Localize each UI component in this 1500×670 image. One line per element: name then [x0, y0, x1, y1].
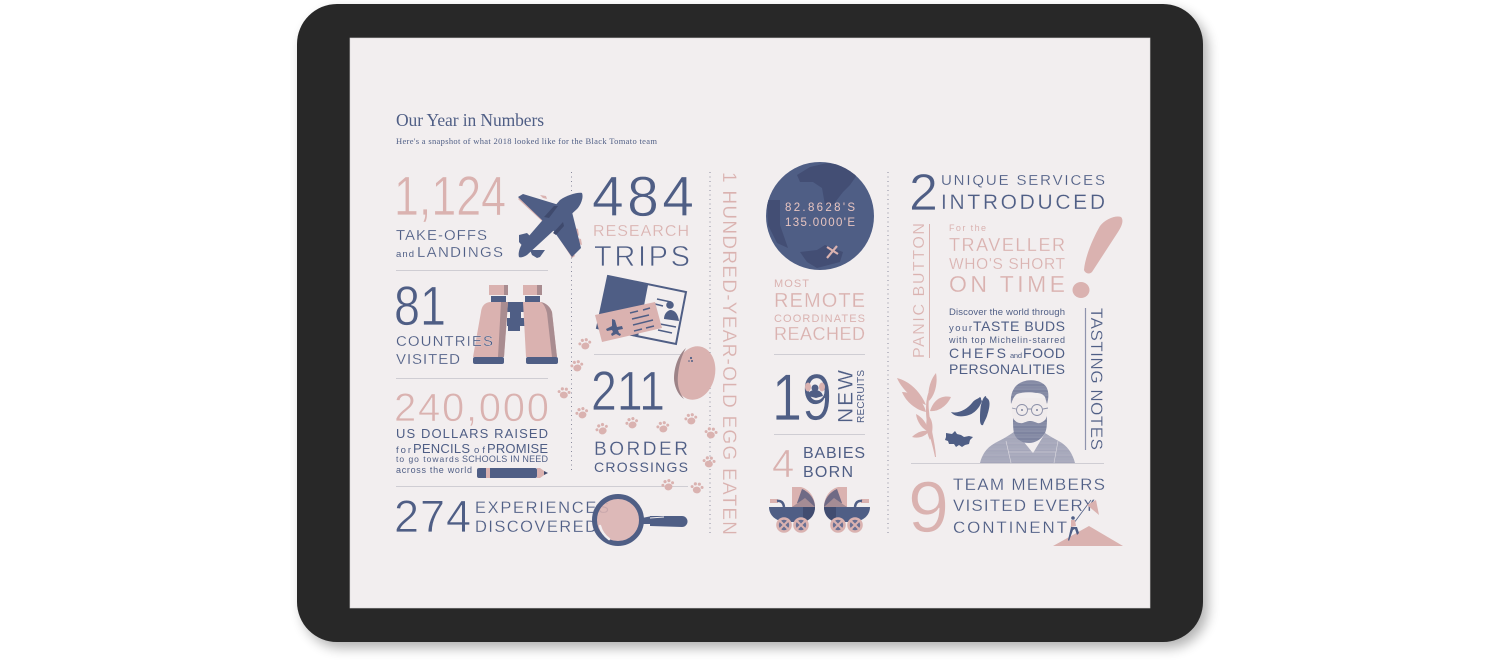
icon: herb sprig	[897, 373, 951, 457]
stat: 2 unique services introduced: 2	[909, 164, 938, 222]
stat: 4 babies born: 4	[772, 442, 794, 486]
icon: people inside nine	[805, 382, 825, 398]
icon: mountain with flag and climber	[1053, 500, 1123, 546]
stat: 9 team members visited every continent	[908, 468, 1105, 548]
text: for the traveller who's short on time	[949, 223, 1066, 297]
paw print trail	[557, 337, 718, 494]
stat: 240,000 dollars raised: US DOLLARS RAISED	[396, 426, 548, 441]
stat: 240,000 dollars raised: for	[396, 445, 411, 456]
text: discover the world through taste buds: TASTE BUDS	[973, 318, 1065, 334]
text: discover the world through taste buds	[948, 307, 1065, 377]
x marker	[827, 246, 838, 258]
stat: 240,000 dollars raised: to go towards	[396, 454, 459, 464]
stat: 4 babies born	[772, 442, 865, 486]
thin row dividers	[396, 270, 1104, 486]
coordinates: 82.8628'S	[785, 202, 855, 214]
stat: 9 team members visited every continent: 9	[908, 468, 949, 548]
icon: magnifying glass	[594, 496, 688, 544]
text: discover the world through taste buds: Discover the world through	[949, 307, 1065, 318]
icon: pencil	[477, 468, 548, 478]
stat: 484 research trips: TRIPS	[594, 241, 690, 273]
stat: 9 team members visited every continent: CONTINENT	[953, 518, 1067, 537]
stat: 19 new recruits: NEW	[834, 370, 858, 423]
stat: 240,000 dollars raised: of	[474, 445, 485, 456]
stat: 211 border crossings: BORDER	[594, 439, 688, 460]
icon: star anise	[945, 431, 973, 447]
text: discover the world through taste buds: PERSONALITIES	[949, 361, 1065, 377]
stat: 484 research trips	[592, 165, 694, 273]
stat: 1,124 take-offs and landings: 1,124	[394, 164, 506, 227]
label: countries visited: VISITED	[396, 351, 460, 368]
text: discover the world through taste buds: FOOD	[1023, 345, 1065, 361]
icon: exclamation mark	[1072, 216, 1122, 298]
vertical text: 1 hundred-year-old egg eaten: 1 HUNDRED-YEAR-OLD EGG EATEN	[718, 172, 739, 535]
globe continents	[767, 163, 857, 268]
stat: 211 border crossings	[591, 359, 688, 475]
stat: 274 experiences discovered	[394, 491, 609, 542]
label: most remote coordinates reached: COORDINATES	[774, 313, 865, 325]
stat: 484 research trips: 484	[592, 165, 694, 229]
icon: prams	[769, 487, 870, 532]
stat: 2 unique services introduced: INTRODUCED	[941, 191, 1105, 214]
text: discover the world through taste buds: with top Michelin-starred	[948, 335, 1065, 345]
stat: 19 new recruits: RECRUITS	[856, 370, 867, 423]
icon: plane	[518, 193, 583, 258]
label: most remote coordinates reached	[774, 278, 865, 344]
stat: 2 unique services introduced	[909, 164, 1105, 222]
stat: 240,000 dollars raised	[394, 386, 549, 475]
icon: binoculars	[473, 285, 558, 364]
label: countries visited	[396, 333, 493, 368]
label: most remote coordinates reached: REACHED	[774, 324, 865, 344]
stat: 240,000 dollars raised: PROMISE	[487, 441, 548, 456]
stat: 9 team members visited every continent: VISITED EVERY	[953, 496, 1095, 515]
stat: 274 experiences discovered: DISCOVERED	[475, 518, 597, 536]
portrait: bearded man with glasses	[980, 380, 1075, 463]
stat: 81 countries visited: 81	[394, 274, 446, 337]
label: countries visited: COUNTRIES	[396, 333, 493, 350]
text: for the traveller who's short on time: WHO'S SHORT	[949, 256, 1066, 273]
stat: 1,124 take-offs and landings	[394, 164, 506, 261]
stat: 240,000 dollars raised: across the world	[396, 465, 472, 475]
globe	[766, 162, 874, 270]
title: Our Year in Numbers	[396, 110, 544, 130]
text: discover the world through taste buds: your	[949, 323, 972, 334]
stat: 240,000 dollars raised: SCHOOLS IN NEED	[462, 454, 548, 464]
text: discover the world through taste buds: and	[1010, 351, 1022, 360]
stat: 211 border crossings: 211	[591, 359, 665, 422]
icon: chillies	[951, 396, 990, 425]
stat: 240,000 dollars raised: PENCILS	[413, 441, 470, 456]
stat: 4 babies born: BABIES	[803, 445, 865, 462]
stat: 1,124 take-offs and landings: TAKE-OFFS	[396, 227, 487, 244]
stat: 211 border crossings: CROSSINGS	[594, 459, 688, 475]
stat: 274 experiences discovered: EXPERIENCES	[475, 499, 609, 517]
vertical label: panic button: PANIC BUTTON	[911, 223, 928, 358]
tablet frame	[297, 4, 1208, 648]
stat: 9 team members visited every continent: TEAM MEMBERS	[953, 475, 1105, 494]
text: for the traveller who's short on time: TRAVELLER	[949, 235, 1065, 255]
vertical label: tasting notes: TASTING NOTES	[1087, 308, 1106, 450]
tablet screen	[350, 38, 1150, 608]
icon: passport and boarding pass	[595, 276, 686, 344]
globe: 135.0000'E	[785, 217, 855, 229]
stat: 19 new recruits: 19	[772, 360, 832, 434]
label: most remote coordinates reached: MOST	[774, 278, 809, 290]
stat: 4 babies born: BORN	[803, 464, 853, 481]
subtitle: Here's a snapshot of what 2018 looked like for the Black Tomato team	[396, 136, 657, 146]
stat: 2 unique services introduced: UNIQUE SERVICES	[941, 172, 1105, 189]
text: for the traveller who's short on time: ON TIME	[949, 271, 1065, 297]
dotted column dividers	[572, 172, 888, 533]
label: most remote coordinates reached: REMOTE	[774, 290, 865, 312]
text: for the traveller who's short on time: For the	[949, 223, 986, 233]
stat: 1,124 take-offs and landings: LANDINGS	[417, 244, 503, 261]
stat: 484 research trips: RESEARCH	[593, 223, 689, 240]
stat: 240,000 dollars raised: 240,000	[394, 386, 549, 430]
stat: 1,124 take-offs and landings: and	[396, 249, 414, 260]
stat: 274 experiences discovered: 274	[394, 491, 471, 542]
text: discover the world through taste buds: CHEFS	[949, 345, 1006, 361]
icon: egg	[670, 342, 720, 404]
